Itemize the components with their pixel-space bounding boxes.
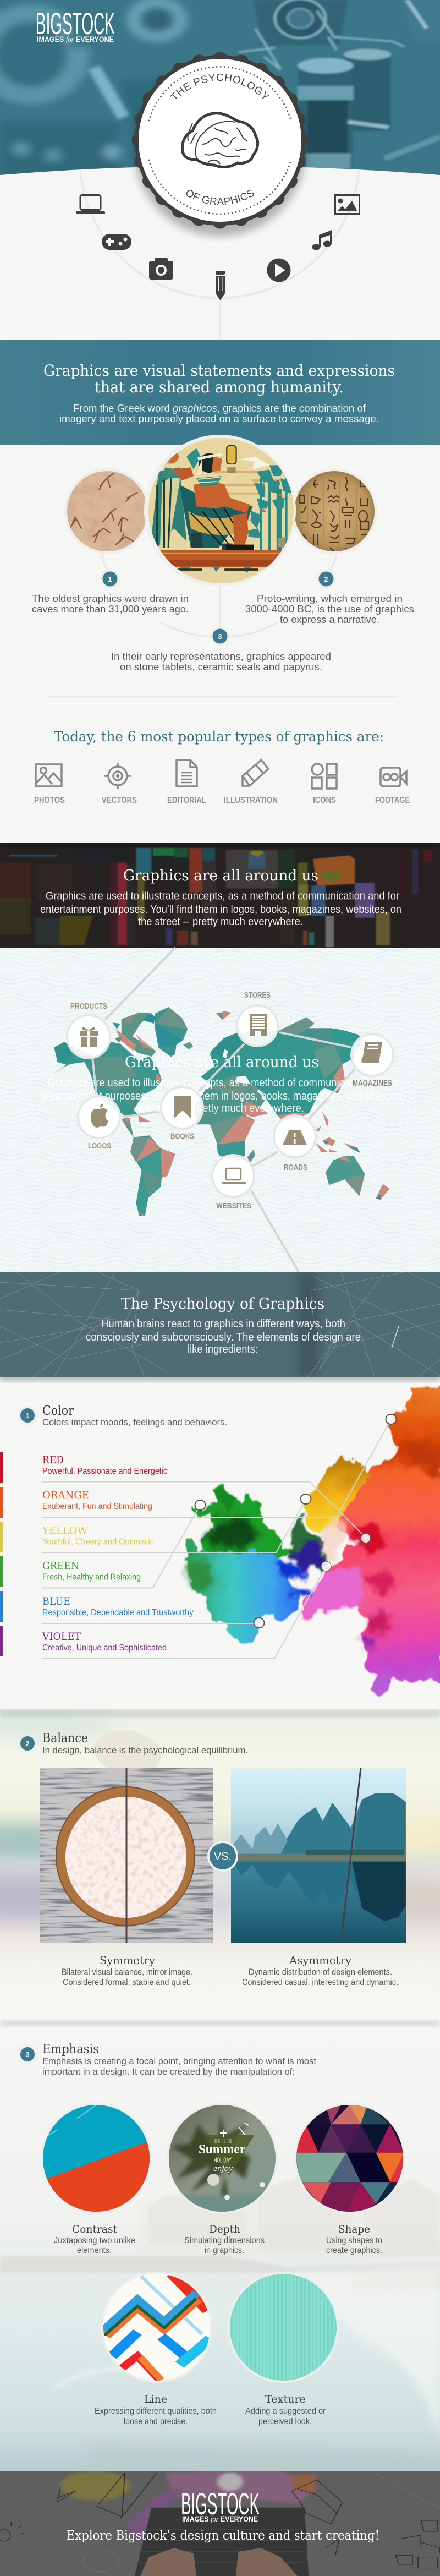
pin: websites bbox=[212, 1155, 254, 1211]
color row: orange: Exuberant, Fun and Stimulating bbox=[42, 1502, 152, 1511]
connector lines between pins bbox=[92, 948, 355, 1272]
element: depth: THE BEST bbox=[214, 2137, 232, 2145]
photo: neon street signs bbox=[0, 843, 440, 948]
color row: yellow bbox=[0, 1522, 154, 1552]
panel: footer call to action: BIGSTOCK bbox=[181, 2486, 260, 2521]
pin: logos bbox=[78, 1096, 120, 1151]
labels: graphic types: FOOTAGE bbox=[375, 796, 410, 805]
logo: Bigstock bbox=[36, 6, 115, 44]
callout dots on splash bbox=[195, 1414, 396, 1628]
pin: stores bbox=[237, 991, 278, 1046]
text: graphics are used to illustrate: Graphics are used to illustrate concepts, as a method of communication and for bbox=[46, 890, 399, 903]
color row: red bbox=[0, 1452, 167, 1483]
caption: asymmetry: Dynamic distribution of design elements. bbox=[249, 1968, 392, 1977]
text: human brains react bbox=[86, 1318, 361, 1355]
text: early representations: In their early representations, graphics appeared bbox=[111, 651, 331, 662]
caption: symmetry: Symmetry bbox=[100, 1954, 156, 1967]
labels: graphic types: PHOTOS bbox=[34, 796, 65, 805]
text: graphics are used to illustrate: entertainment purposes. You’ll find them in logos, books, magazines, websites, on bbox=[40, 904, 402, 916]
labels: graphic types: EDITORIAL bbox=[167, 796, 206, 805]
element: contrast: elements. bbox=[77, 2246, 112, 2255]
panel: psychology of graphics band bbox=[0, 1272, 440, 1377]
pin: stores: STORES bbox=[244, 991, 271, 1000]
pin: websites: WEBSITES bbox=[216, 1201, 251, 1211]
australia and new zealand bbox=[326, 1156, 389, 1200]
element: texture: Texture bbox=[265, 2393, 306, 2405]
icon ring arc bbox=[80, 171, 359, 298]
text: oldest graphics: The oldest graphics were drawn in bbox=[32, 593, 189, 604]
panel: world map bbox=[0, 948, 440, 1272]
element: texture: perceived look. bbox=[258, 2417, 312, 2426]
icon: play bbox=[267, 259, 290, 282]
icon: icons grid bbox=[312, 764, 337, 789]
logo: Bigstock bbox=[181, 2486, 260, 2524]
pin: roads: ROADS bbox=[284, 1163, 307, 1172]
color row: green bbox=[0, 1556, 141, 1587]
greenland bbox=[155, 1007, 232, 1058]
africa bbox=[194, 1090, 268, 1162]
text: emphasis intro bbox=[42, 2057, 316, 2077]
badge: number 2: 2 bbox=[324, 575, 328, 583]
panel: hero bbox=[0, 0, 440, 340]
caption: symmetry bbox=[62, 1954, 193, 1987]
element: shape: create graphics. bbox=[326, 2246, 382, 2255]
photo: sketches and keyboard bbox=[0, 2471, 440, 2576]
logo: Bigstock: IMAGES for EVERYONE bbox=[182, 2514, 258, 2524]
text: early representations bbox=[111, 651, 331, 672]
color row: red: Powerful, Passionate and Energetic bbox=[42, 1467, 167, 1476]
icon: pencil bbox=[216, 271, 225, 300]
color row: violet: Creative, Unique and Sophisticated bbox=[42, 1643, 167, 1653]
color row: green: GREEN bbox=[42, 1560, 79, 1572]
south america bbox=[122, 1115, 175, 1216]
image: symmetry salt bowl bbox=[40, 1768, 213, 1943]
eurasia bbox=[201, 1017, 362, 1121]
pin: books bbox=[161, 1087, 203, 1141]
heading: six popular types: Today, the 6 most popular types of graphics are: bbox=[54, 729, 384, 745]
element: texture bbox=[228, 2272, 339, 2426]
element: line: Expressing different qualities, both bbox=[95, 2407, 217, 2416]
text: graphics are used to illustrate: the street -- pretty much everywhere. bbox=[138, 916, 303, 928]
element: depth: HOLIDAY bbox=[214, 2156, 232, 2164]
element: shape bbox=[294, 2102, 407, 2255]
panel: footer call to action bbox=[0, 2471, 440, 2576]
element: texture: Adding a suggested or bbox=[245, 2407, 326, 2416]
text: greek word definition: imagery and text purposely placed on a surface to convey a message. bbox=[59, 413, 379, 424]
heading: graphics are visual statements bbox=[43, 362, 395, 396]
heading: color: Color bbox=[42, 1404, 74, 1418]
color row: blue: Responsible, Dependable and Trustworthy bbox=[42, 1608, 194, 1617]
badge: number 3: 3 bbox=[218, 632, 222, 641]
labels: graphic types: ILLUSTRATION bbox=[224, 796, 278, 805]
color row: yellow: YELLOW bbox=[42, 1524, 87, 1536]
element: shape: Using shapes to bbox=[326, 2236, 382, 2245]
badge: number 1 bbox=[100, 569, 120, 589]
text: human brains react: Human brains react to graphics in different ways, both bbox=[101, 1318, 345, 1330]
ghost text over map: Graphics are used to illustrate concepts, as a method of communication and for bbox=[47, 1077, 400, 1089]
text: oldest graphics: caves more than 31,000 years ago. bbox=[32, 604, 189, 615]
badge: number 1: 1 bbox=[108, 575, 112, 583]
text: greek word definition bbox=[59, 403, 379, 424]
color row: blue bbox=[0, 1591, 194, 1622]
text: proto-writing: to express a narrative. bbox=[280, 614, 380, 625]
ghost text over map bbox=[41, 1077, 402, 1114]
text: emphasis intro: important in a design. It can be created by the manipulation of: bbox=[42, 2067, 295, 2077]
background: blurred stone photo bbox=[0, 1709, 440, 1960]
image: hieroglyphs bbox=[295, 471, 375, 551]
element: shape: Shape bbox=[338, 2223, 370, 2235]
badge: number 3: 3 bbox=[25, 2050, 30, 2059]
text: proto-writing: Proto-writing, which emerged in bbox=[257, 593, 403, 604]
element: contrast: Juxtaposing two unlike bbox=[54, 2236, 135, 2245]
icon: music bbox=[312, 230, 332, 250]
icon: footage bbox=[381, 768, 406, 786]
text: graphics are used to illustrate bbox=[40, 890, 402, 928]
panel: graphics are all around us bbox=[0, 843, 440, 948]
labels: graphic types bbox=[34, 796, 410, 805]
hero photo: vintage camera duotone bbox=[0, 0, 440, 176]
icon: vectors bbox=[105, 763, 131, 789]
panel: definition band bbox=[0, 340, 440, 445]
icon: editorial bbox=[177, 760, 197, 786]
badge: number 3 bbox=[18, 2044, 37, 2064]
badge: number 1: 1 bbox=[25, 1412, 30, 1420]
badge: vs: VS. bbox=[214, 1851, 232, 1863]
color row: blue: BLUE bbox=[42, 1595, 70, 1607]
background: coastal town and sea bbox=[0, 2020, 440, 2471]
shadow under psychology band bbox=[0, 1374, 440, 1381]
element: depth: Simulating dimensions bbox=[184, 2236, 265, 2245]
icon: picture bbox=[336, 195, 360, 214]
caption: asymmetry bbox=[242, 1954, 398, 1987]
element: depth: Summer bbox=[199, 2142, 245, 2157]
heading: psychology of graphics: The Psychology of Graphics bbox=[121, 1295, 324, 1312]
element: depth: enjoy bbox=[213, 2164, 233, 2173]
pin: magazines bbox=[351, 1034, 393, 1088]
text: greek word definition: From the Greek word graphicos, graphics are the combination of bbox=[73, 403, 366, 414]
image: egyptian papyrus bbox=[143, 435, 300, 589]
badge: the psychology of graphics: OF GRAPHICS bbox=[186, 189, 254, 205]
pin: books: BOOKS bbox=[170, 1131, 194, 1141]
badge: the psychology of graphics bbox=[131, 52, 309, 241]
icon: laptop bbox=[76, 195, 105, 214]
color row: green: Fresh, Healthy and Relaxing bbox=[42, 1573, 141, 1582]
badge: number 1 bbox=[18, 1405, 37, 1425]
element: depth bbox=[167, 2102, 278, 2255]
heading: graphics are visual statements: Graphics are visual statements and expressions bbox=[43, 362, 395, 380]
element: contrast bbox=[41, 2102, 152, 2255]
heading: emphasis: Emphasis bbox=[42, 2042, 99, 2057]
image: asymmetry karst landscape bbox=[231, 1768, 407, 1943]
ghost heading over map: Graphics are all around us bbox=[125, 1054, 319, 1071]
pin: products: PRODUCTS bbox=[70, 1002, 107, 1011]
icon: gamepad bbox=[102, 234, 131, 250]
text: human brains react: like ingredients: bbox=[188, 1343, 258, 1355]
color row: orange: ORANGE bbox=[42, 1489, 89, 1501]
panel: color bbox=[0, 1387, 440, 1695]
element: line: Line bbox=[144, 2393, 167, 2405]
element: line bbox=[95, 2271, 217, 2426]
labels: graphic types: VECTORS bbox=[102, 796, 137, 805]
text: oldest graphics bbox=[32, 593, 189, 615]
ghost text over map: entertainment purposes. You’ll find them in logos, books, magazines, websites, on bbox=[41, 1090, 402, 1102]
icon: camera bbox=[149, 258, 173, 280]
world map: low-poly continents bbox=[53, 1007, 389, 1216]
image: cave painting bbox=[67, 471, 145, 551]
leader lines to splash bbox=[42, 1419, 391, 1659]
badge: the psychology of graphics: THE PSYCHOLOGY bbox=[170, 74, 270, 100]
element: contrast: Contrast bbox=[72, 2223, 117, 2235]
badge: number 2: 2 bbox=[25, 1740, 30, 1748]
heading: graphics are visual statements: that are shared among humanity. bbox=[95, 378, 344, 396]
icon: brain bbox=[182, 113, 258, 167]
color row: orange bbox=[0, 1487, 152, 1518]
color row: yellow: Youthful, Cheery and Optimistic bbox=[42, 1538, 154, 1546]
labels: graphic types: ICONS bbox=[313, 796, 336, 805]
badge: vs bbox=[207, 1841, 238, 1872]
heading: graphics are all around us: Graphics are all around us bbox=[123, 867, 318, 884]
caption: symmetry: Considered formal, stable and quiet. bbox=[63, 1978, 191, 1987]
text: emphasis intro: Emphasis is creating a focal point, bringing attention to what is most bbox=[42, 2057, 316, 2066]
ink splash illustration bbox=[185, 1387, 440, 1695]
icon: illustration bbox=[243, 760, 268, 786]
element: depth: in graphics. bbox=[205, 2246, 244, 2255]
ghost text over map: the street -- pretty much everywhere. bbox=[139, 1102, 304, 1114]
vertical connector from pencil bbox=[219, 300, 221, 340]
connectors bbox=[102, 555, 337, 637]
icon: photos bbox=[36, 764, 62, 786]
caption: symmetry: Bilateral visual balance, mirror image. bbox=[62, 1968, 193, 1977]
call to action text: Explore Bigstock’s design culture and start creating! bbox=[67, 2529, 380, 2543]
badge: number 2 bbox=[20, 1736, 35, 1751]
pin: roads bbox=[274, 1115, 316, 1172]
heading: balance: Balance bbox=[42, 1731, 88, 1746]
text: proto-writing: 3000-4000 BC, is the use of graphics bbox=[245, 604, 414, 615]
color row: violet bbox=[0, 1626, 167, 1656]
panel: balance bbox=[0, 1709, 440, 1987]
text: color intro: Colors impact moods, feelings and behaviors. bbox=[42, 1418, 227, 1428]
badge: number 3 bbox=[210, 626, 230, 646]
caption: asymmetry: Asymmetry bbox=[289, 1954, 352, 1967]
element: depth: Depth bbox=[209, 2223, 240, 2235]
logo: Bigstock: IMAGES for EVERYONE bbox=[37, 35, 114, 44]
color row: red: RED bbox=[42, 1454, 64, 1466]
panel: six types of graphics bbox=[34, 729, 410, 805]
pin: magazines: MAGAZINES bbox=[353, 1079, 392, 1088]
color row: violet: VIOLET bbox=[42, 1631, 81, 1643]
pin: products bbox=[67, 1002, 110, 1058]
caption: asymmetry: Considered casual, interesting and dynamic. bbox=[242, 1978, 398, 1987]
pin: logos: LOGOS bbox=[88, 1141, 111, 1151]
panel: emphasis bbox=[0, 2020, 440, 2471]
north america bbox=[53, 1013, 162, 1117]
panel: history of graphics bbox=[32, 435, 414, 672]
panel: hero: BIGSTOCK bbox=[36, 6, 115, 41]
text: balance intro: In design, balance is the psychological equilibrium. bbox=[42, 1746, 248, 1755]
badge: number 2 bbox=[316, 569, 336, 589]
text: early representations: on stone tablets, ceramic seals and papyrus. bbox=[120, 661, 322, 672]
text: proto-writing bbox=[245, 593, 414, 625]
white curved ground bbox=[0, 166, 440, 340]
text: human brains react: consciously and subconsciously. The elements of design are bbox=[86, 1331, 361, 1343]
element: line: loose and precise. bbox=[124, 2417, 188, 2426]
asia pacific islands bbox=[316, 1112, 360, 1153]
